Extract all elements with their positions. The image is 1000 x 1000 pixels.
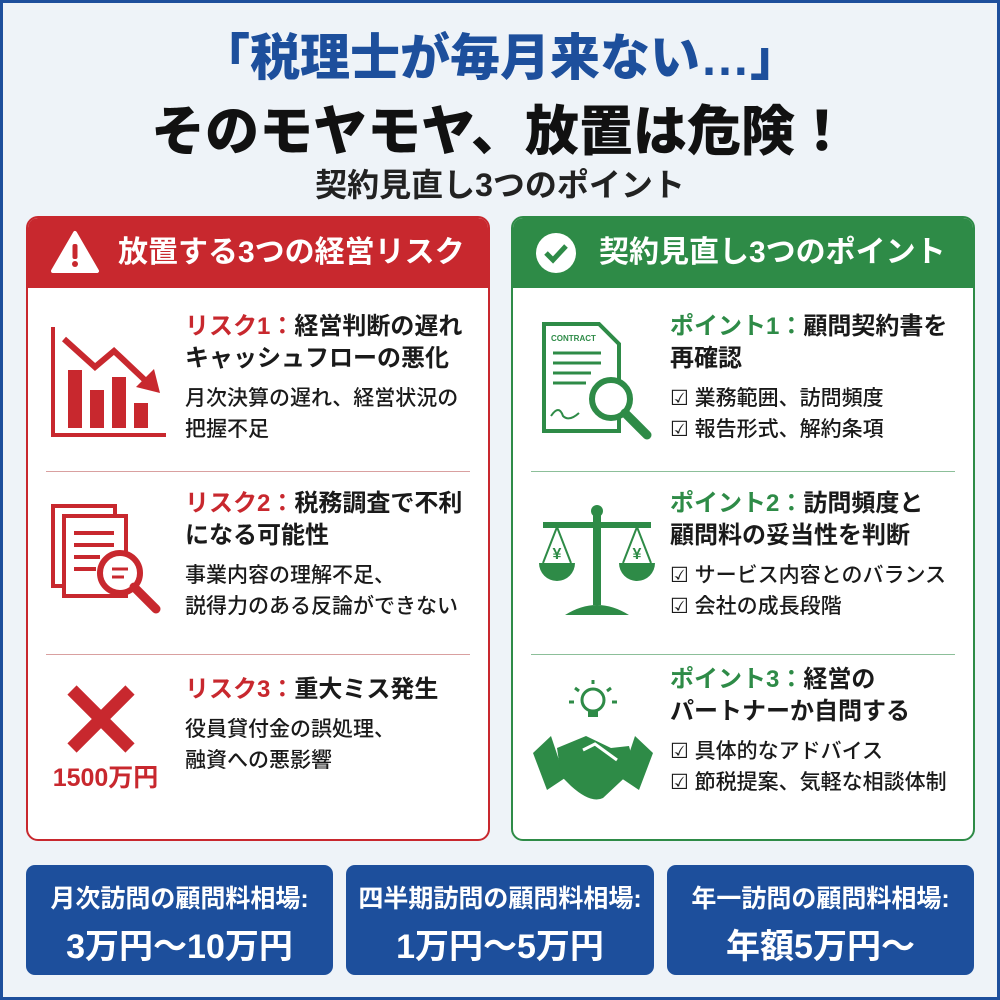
point 3: パートナーか自問する [670, 698, 910, 725]
fee box: yearly [667, 865, 974, 975]
header: points [513, 218, 973, 288]
fee box: quarterly [346, 865, 654, 975]
fee box: quarterly: 1万円〜5万円 [396, 928, 604, 966]
risk 2: リスク2：税務調査で不利 [185, 490, 462, 517]
risk 1: リスク1：経営判断の遅れ [185, 313, 462, 340]
point 1 [542, 313, 947, 441]
point 2: 顧問料の妥当性を判断 [670, 522, 910, 549]
risk 2: になる可能性 [185, 522, 329, 549]
point 3: ポイント3：経営の [670, 666, 875, 693]
risk 1: キャッシュフローの悪化 [185, 345, 449, 372]
point 2: ☑ 会社の成長段階 [670, 595, 842, 618]
fee box: quarterly: 四半期訪問の顧問料相場: [358, 885, 642, 913]
subtitle headline: そのモヤモヤ、放置は危険！ [151, 102, 849, 162]
risk 3 [53, 676, 438, 792]
risk 3: 融資への悪影響 [185, 749, 332, 772]
icon: scales: ¥ [633, 546, 642, 563]
icon: check circle [536, 233, 576, 273]
point 3: ☑ 節税提案、気軽な相談体制 [670, 771, 947, 794]
icon: scales [539, 505, 655, 615]
risk 2: 事業内容の理解不足、 [185, 564, 395, 587]
subheading: 契約見直し3つのポイント [315, 167, 685, 203]
header: risks [28, 218, 488, 288]
header: risks: 放置する3つの経営リスク [118, 236, 465, 269]
point 2: ☑ サービス内容とのバランス [670, 564, 946, 587]
point 2: ポイント2：訪問頻度と [670, 490, 923, 517]
risk 2: 説得力のある反論ができない [185, 595, 458, 618]
fee box: yearly: 年額5万円〜 [726, 928, 915, 966]
point 3 [533, 666, 947, 800]
panel: points [511, 216, 975, 841]
panel: risks [26, 216, 490, 841]
risk 1: 把握不足 [185, 418, 269, 441]
icon: warning [51, 230, 100, 273]
risk 1: 月次決算の遅れ、経営状況の [185, 387, 458, 410]
icon: cross with amount: 1500万円 [53, 764, 158, 792]
point 2 [539, 490, 946, 618]
risk 3: リスク3：重大ミス発生 [185, 676, 438, 703]
point 1: ポイント1：顧問契約書を [670, 313, 947, 340]
risk 1 [51, 313, 462, 441]
point 1: ☑ 業務範囲、訪問頻度 [670, 387, 884, 410]
risk 2 [51, 490, 462, 618]
fee box: monthly [26, 865, 333, 975]
point 1: 再確認 [670, 345, 742, 372]
icon: documents magnifier [51, 504, 160, 614]
risk 3: 役員貸付金の誤処理、 [185, 718, 395, 741]
fee box: yearly: 年一訪問の顧問料相場: [691, 885, 950, 913]
icon: handshake with bulb [533, 680, 653, 800]
fee box: monthly: 3万円〜10万円 [66, 928, 293, 966]
title: 「税理士が毎月来ない…」 [200, 30, 800, 86]
icon: contract [542, 322, 652, 440]
icon: scales: ¥ [553, 546, 562, 563]
icon: falling chart [51, 327, 166, 437]
fee box: monthly: 月次訪問の顧問料相場: [50, 885, 309, 913]
header: points: 契約見直し3つのポイント [599, 236, 946, 269]
point 3: ☑ 具体的なアドバイス [670, 740, 883, 763]
icon: cross with amount [53, 685, 158, 792]
point 1: ☑ 報告形式、解約条項 [670, 418, 884, 441]
icon: contract: CONTRACT [551, 334, 596, 343]
